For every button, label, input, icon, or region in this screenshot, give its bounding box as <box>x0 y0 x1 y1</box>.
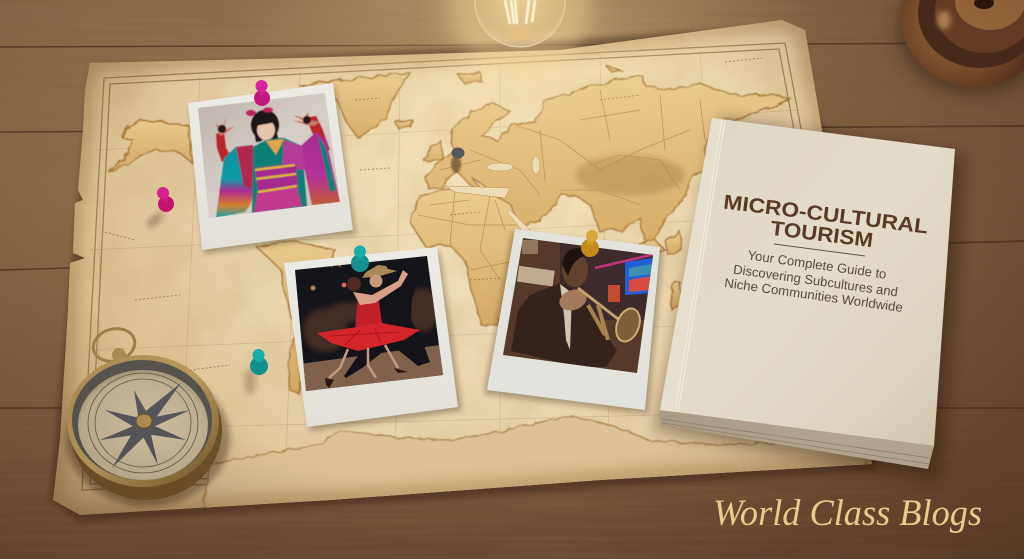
book title: MICRO-CULTURAL <box>722 191 929 239</box>
pin: navy on Europe <box>451 148 464 173</box>
country borders <box>418 90 705 280</box>
book subtitle <box>723 247 904 315</box>
dance floor <box>304 345 443 391</box>
kimono figure <box>216 108 340 218</box>
lamp glow on map <box>90 20 822 320</box>
brand signature: World Class Blogs <box>713 493 982 534</box>
man in suit <box>511 283 617 367</box>
page block <box>659 410 934 469</box>
neon signs <box>625 258 653 295</box>
spine crease <box>660 118 722 412</box>
Antarctica coast <box>202 414 867 508</box>
brass lamp base, top right <box>897 0 1024 94</box>
UK <box>425 140 444 162</box>
pin: teal on tango photo <box>351 246 369 272</box>
compass ring <box>90 324 138 366</box>
cover <box>660 118 955 446</box>
pin: magenta on map <box>144 187 174 230</box>
pin: teal on map <box>244 349 268 395</box>
pin: gold on trumpeter photo <box>581 230 599 257</box>
map shadow <box>50 26 878 522</box>
book subtitle: Your Complete Guide to <box>747 247 887 282</box>
woman <box>355 300 382 328</box>
polaroid: tango dancers <box>284 247 462 431</box>
map frame border <box>80 43 862 490</box>
tiny map labels <box>105 58 762 375</box>
Tibet / Asia relief shading <box>575 155 685 195</box>
Eurasia <box>425 75 790 245</box>
South America fragment <box>257 240 335 395</box>
polaroid: kimono dancer <box>188 83 356 254</box>
Greenland <box>300 73 410 138</box>
book: Micro-Cultural Tourism <box>659 118 955 469</box>
Caspian, Black Sea and Mediterranean waters <box>445 156 540 238</box>
blurred audience <box>303 288 440 352</box>
Arctic islands <box>458 72 482 85</box>
trumpet <box>578 288 622 322</box>
Iceland <box>395 120 412 128</box>
book shadow <box>655 118 965 480</box>
compass rose <box>100 383 190 468</box>
Africa <box>410 187 535 326</box>
book subtitle: Niche Communities Worldwide <box>723 275 904 315</box>
Southeast Asia islands <box>635 240 665 255</box>
burnt paper edges <box>53 20 872 515</box>
book subtitle: Discovering Subcultures and <box>732 262 899 300</box>
light bulb <box>450 0 590 75</box>
pin: magenta on kimono photo <box>254 80 270 106</box>
book title second line: TOURISM <box>769 217 874 252</box>
compass dial <box>95 379 191 467</box>
polaroid: jazz trumpeter <box>484 229 663 414</box>
filament <box>505 0 535 24</box>
vintage world map <box>40 10 890 530</box>
compass case <box>70 360 222 500</box>
Alaska / North America <box>108 120 192 172</box>
brass compass <box>66 324 230 506</box>
Australia fragment <box>672 282 682 310</box>
landmasses <box>108 65 880 520</box>
man in black <box>344 282 430 378</box>
